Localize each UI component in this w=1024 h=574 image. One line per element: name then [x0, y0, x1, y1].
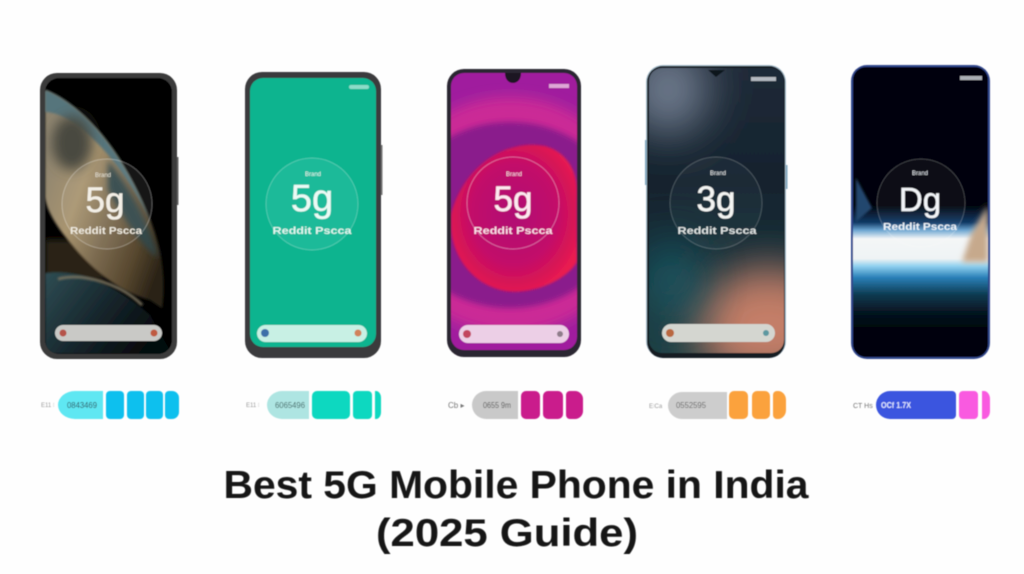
screen wallpaper [450, 72, 578, 351]
phone 3: magenta wallpaper [446, 68, 582, 358]
screen wallpaper [853, 67, 988, 357]
search bar [459, 325, 569, 343]
notch [505, 73, 521, 83]
5g reading: 5g [291, 178, 333, 220]
status icons [549, 84, 569, 88]
3g reading: 3g [697, 180, 735, 219]
dial circle [62, 159, 152, 249]
search bar [257, 325, 367, 342]
phone body [646, 65, 786, 358]
phone 2: green wallpaper [245, 72, 382, 358]
status icons [751, 77, 776, 81]
side label: E11 ⫶ [41, 402, 55, 409]
caption: Reddit Pscca [272, 226, 352, 237]
phone body [40, 73, 177, 359]
dial circle [670, 157, 762, 249]
phone 5: black wallpaper with light band [851, 65, 990, 359]
spec bar 2: teal [246, 391, 381, 419]
top label: Brand [912, 171, 928, 177]
Dg reading: Dg [899, 181, 941, 218]
dial circle [467, 157, 559, 249]
segments [729, 391, 748, 419]
search bar [55, 325, 162, 341]
spec bar 4: orange [649, 391, 786, 419]
caption: Reddit Pscca [474, 226, 553, 237]
spec bar 1: cyan: 0843469 [67, 401, 98, 410]
title [224, 464, 809, 555]
segments [521, 391, 540, 419]
search bar [662, 324, 775, 342]
dial circle [266, 158, 358, 250]
spec bar 3: magenta [448, 391, 583, 419]
model pill [472, 391, 518, 419]
infographic canvas [39, 64, 991, 555]
segments [106, 391, 124, 419]
screen wallpaper [648, 67, 785, 354]
caption: Reddit Pscca [70, 226, 142, 237]
title line 2: (2025 Guide) [376, 512, 638, 555]
phone body [851, 65, 990, 359]
phone 4: dark gradient wallpaper [644, 64, 788, 359]
side label: CT Hs [853, 403, 873, 410]
side label: E⫶Ca [649, 403, 663, 410]
title line 1: Best 5G Mobile Phone in India [224, 464, 809, 507]
phone 1: dark planet wallpaper [40, 73, 178, 359]
status icons [960, 76, 982, 80]
5g reading: 5g [494, 180, 532, 219]
caption: Reddit Pscca [883, 222, 958, 233]
top label: Brand [305, 172, 321, 178]
model pill [58, 391, 103, 419]
spec bar 5: blue and pink [853, 391, 990, 419]
top label: Brand [710, 171, 726, 177]
status icons [349, 85, 369, 89]
model pill [267, 391, 309, 419]
segments [312, 391, 350, 419]
spec bar 4: orange: 0552595 [676, 401, 707, 410]
side label: Cb ▸ [448, 401, 464, 410]
dial circle [877, 159, 965, 247]
segments [959, 391, 978, 419]
phone body [447, 69, 581, 357]
phone body [245, 72, 381, 358]
model pill [876, 391, 956, 419]
top label: Brand [95, 173, 111, 179]
screen wallpaper [45, 78, 172, 354]
5g reading: 5g [86, 181, 124, 220]
caption: Reddit Pscca [678, 226, 757, 237]
top label: Brand [506, 172, 522, 178]
spec bar 1: cyan [41, 391, 179, 419]
spec bar 3: magenta: 0655 9m [483, 401, 511, 410]
side label: E11 ⫶ [246, 402, 260, 409]
spec bar 2: teal: 6065496 [275, 401, 306, 410]
notch [708, 70, 725, 77]
model pill [668, 392, 727, 419]
screen wallpaper [250, 78, 376, 347]
spec bar 5: blue and pink: OCf 1.7X [881, 401, 912, 410]
